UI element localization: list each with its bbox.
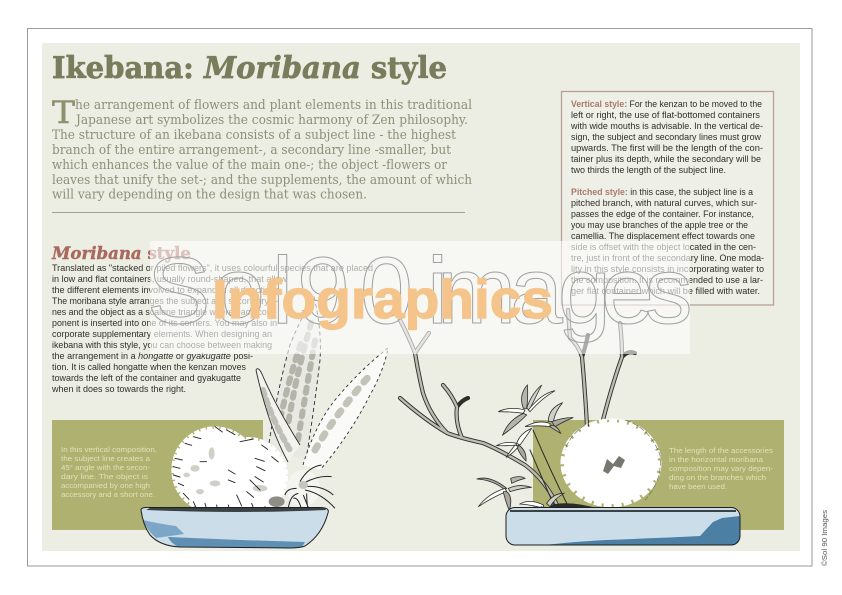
text: vertical style: tainer plus its depth, while the secondary will be	[571, 154, 761, 164]
body text: Moribana style: when it does so towards the right.	[51, 384, 186, 394]
watermark: Sol90images outline: Sol90images	[147, 238, 692, 344]
body text: Moribana style	[51, 263, 373, 394]
background panel	[42, 43, 800, 551]
flower: white round bloom	[563, 420, 660, 505]
text: vertical style: Vertical style: For the kenzan to be moved to the	[571, 99, 762, 109]
text: vertical style: with wide mouths is advisable. In the vertical de-	[570, 121, 763, 131]
intro text block	[52, 95, 472, 202]
caption: horizontal composition: have been used.	[669, 482, 727, 491]
intro text block: he arrangement of flowers and plant elements in this traditional	[75, 97, 472, 112]
text: pitched style: camellia. The displacement effect towards one	[571, 231, 755, 241]
text: vertical style: sign, the subject and secondary lines must grow	[571, 132, 762, 142]
leaves: five clusters	[477, 385, 573, 531]
caption: vertical composition: accompanied by one high	[61, 481, 150, 490]
body text: Moribana style: corporate supplementary elements. When designing an	[52, 329, 272, 339]
body text: Moribana style: ponent is inserted into one of its corners. You may also in-	[52, 318, 280, 328]
text: pitched style: tre, just in front of the secondary line. One moda-	[571, 253, 764, 263]
body text: Moribana style: The moribana style arranges the subject and secondary li-	[52, 296, 278, 306]
body text: Moribana style: Translated as "stacked or piled flowers", it uses colourful species that are placed	[52, 263, 373, 273]
drop cap: T	[52, 95, 75, 131]
text: pitched style: Pitched style: in this case, the subject line is a	[571, 187, 753, 197]
text: vertical style: upwards. The first will be the length of the con-	[571, 143, 763, 153]
green caption panel: left	[52, 420, 263, 530]
intro text block: which enhances the value of the main one-; the object -flowers or	[52, 157, 448, 172]
branches	[397, 295, 635, 512]
flowers: two round blooms and small spiky bloom	[173, 427, 335, 518]
illustration: vertical moribana arrangement	[141, 297, 388, 548]
spike: secondary line	[303, 348, 388, 470]
body text: Moribana style: tion. It is called hongatte when the kenzan moves	[52, 362, 247, 372]
text: vertical style: two thirds the length of the subject line.	[571, 165, 726, 175]
caption: vertical composition: 45° angle with the secon-	[61, 463, 150, 472]
green caption panel: right	[533, 420, 784, 530]
intro text block: Japanese art symbolizes the cosmic harmony of Zen philosophy.	[74, 112, 468, 127]
body text: Moribana style: in low and flat containers, usually round-shaped, that allow	[52, 274, 288, 284]
caption: horizontal composition	[669, 446, 773, 491]
caption: vertical composition	[61, 445, 157, 499]
body text: Moribana style: the different elements involved to expand in all directions.	[52, 285, 282, 295]
text: pitched style: pitched branch, with natural curves, which sur-	[571, 198, 757, 208]
watermark veil	[150, 241, 690, 354]
container: blue tray	[506, 508, 740, 545]
caption: horizontal composition: composition may vary depen-	[669, 464, 773, 473]
text: vertical style	[570, 99, 763, 175]
caption: vertical composition: accessory and a short one.	[61, 490, 155, 499]
text: pitched style	[571, 187, 764, 296]
container: blue bowl	[141, 507, 328, 548]
body text: Moribana style: the arrangement in a hongatte or gyakugatte posi-	[52, 351, 253, 361]
panel: vertical and pitched styles	[562, 92, 774, 305]
caption: horizontal composition: in the horizontal moribana	[669, 455, 764, 464]
text: pitched style: side is offset with the object located in the cen-	[571, 242, 756, 252]
spike: tall subject line	[268, 297, 320, 460]
body text: Moribana style: nes and the object as a scalene triangle where each com-	[52, 307, 277, 317]
caption: vertical composition: dary line. The object is	[61, 472, 148, 481]
text: pitched style: ger flat container which will be filled with water.	[571, 286, 760, 296]
caption: horizontal composition: ding on the branches which	[669, 473, 766, 482]
illustration: pitched moribana arrangement	[397, 295, 740, 545]
credit: ©Sol 90 Images	[821, 509, 829, 566]
body text: Moribana style: towards the left of the container and gyakugatte	[52, 373, 241, 383]
intro text block: will vary depending on the design that was chosen.	[52, 186, 367, 202]
intro text block: branch of the entire arrangement-, a secondary line -smaller, but	[52, 142, 451, 157]
text: vertical style: left or right, the use of flat-bottomed containers	[571, 110, 761, 120]
intro text block: The structure of an ikebana consists of a subject line - the highest	[52, 127, 456, 142]
intro text block: leaves that unify the set-; and the supplements, the amount of which	[52, 172, 472, 187]
watermark: Infographics: Infographics	[212, 268, 553, 330]
body text: Moribana style: ikebana with this style, you can choose between making	[52, 340, 272, 350]
text: pitched style: lity in this style consists in incorporating water to	[571, 264, 764, 274]
caption: vertical composition: In this vertical composition,	[61, 445, 157, 454]
spike: short accessory	[256, 369, 300, 462]
text: pitched style: the composition. It is recommended to use a lar-	[571, 275, 763, 285]
section heading: Moribana style: Moribana style	[51, 244, 191, 263]
caption: horizontal composition: The length of the accessories	[669, 446, 773, 455]
title: Ikebana: Moribana style	[52, 50, 447, 85]
text: pitched style: passes the edge of the container. For instance,	[571, 209, 754, 219]
text: pitched style: you may use branches of the apple tree or the	[571, 220, 748, 230]
caption: vertical composition: the subject line creates a	[61, 454, 151, 463]
